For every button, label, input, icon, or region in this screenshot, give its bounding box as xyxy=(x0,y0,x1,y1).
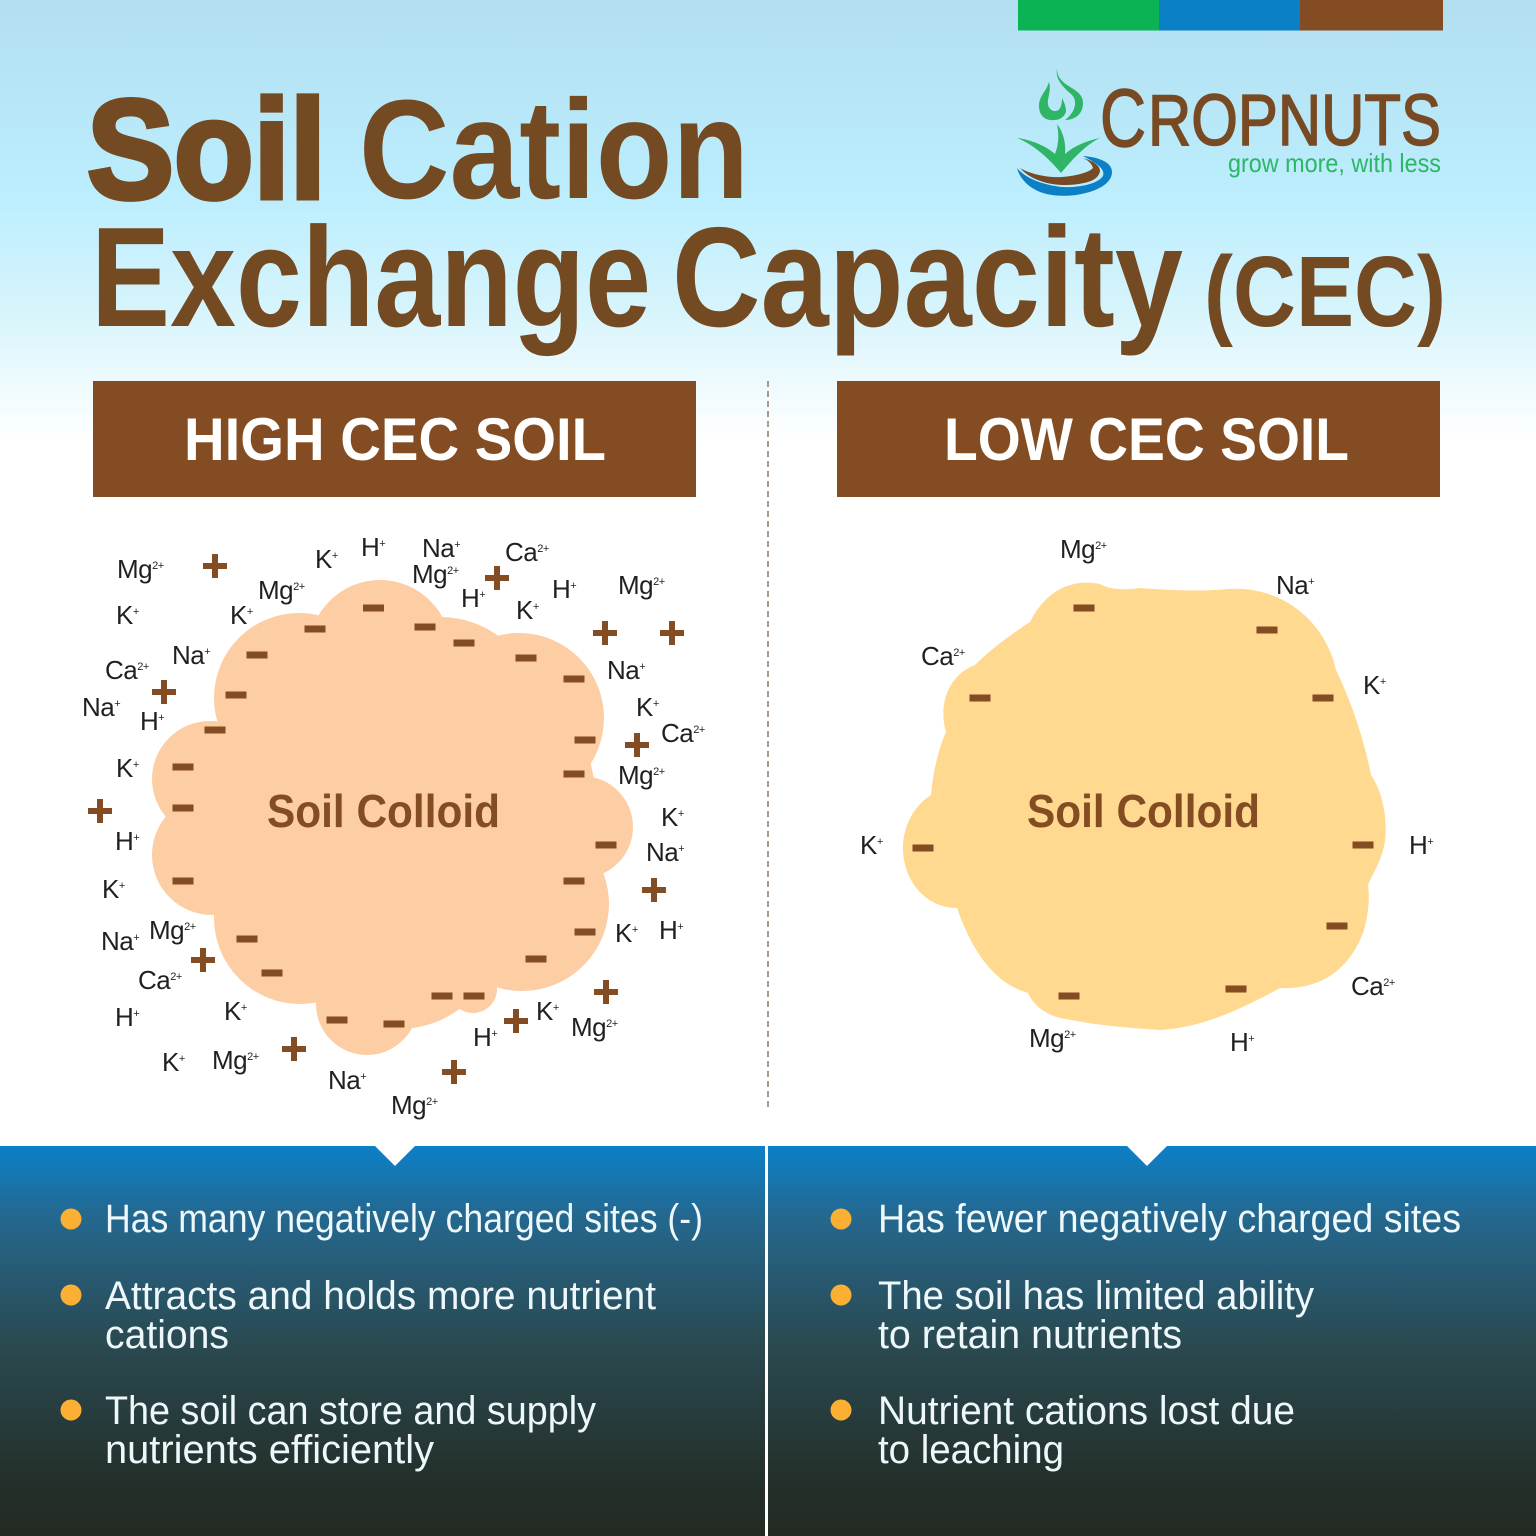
nutrient ions: high: K xyxy=(224,996,241,1026)
nutrient ions: high: + xyxy=(677,921,683,933)
heading banner: high CEC xyxy=(93,381,696,497)
nutrient ions: high: K xyxy=(116,753,133,783)
heading banner: low CEC xyxy=(837,381,1440,497)
nutrient ions: high: H xyxy=(659,915,677,945)
nutrient ions: low xyxy=(860,534,1433,1057)
nutrient ions: low: 2+ xyxy=(1095,540,1107,552)
nutrient ions: high: Mg xyxy=(391,1090,426,1120)
nutrient ions: high: + xyxy=(114,698,120,710)
nutrient ions: high: H xyxy=(115,826,133,856)
label: soil colloid: Soil Colloid xyxy=(267,785,500,837)
bullet text: to retain nutrients xyxy=(878,1313,1182,1357)
nutrient ions: high: Ca xyxy=(105,655,137,685)
nutrient ions: high: Mg xyxy=(212,1045,247,1075)
nutrient ions: low: 2+ xyxy=(1064,1029,1076,1041)
nutrient ions: low: Mg xyxy=(1029,1023,1064,1053)
brand name: C xyxy=(1100,73,1146,164)
nutrient ions: low: 2+ xyxy=(1383,977,1395,989)
nutrient ions: high: Mg xyxy=(149,915,184,945)
nutrient ions: low: H xyxy=(1230,1027,1248,1057)
bullet text: Has many negatively charged sites (-) xyxy=(105,1197,703,1241)
bullet points xyxy=(60,1208,82,1420)
nutrient ions: high: K xyxy=(636,692,653,722)
bullet points xyxy=(830,1208,852,1420)
nutrient ions: low: K xyxy=(1363,670,1380,700)
nutrient ions: high: + xyxy=(332,550,338,562)
positive charges xyxy=(88,554,684,1084)
nutrient ions: high: K xyxy=(661,802,678,832)
nutrient ions: high: Mg xyxy=(618,760,653,790)
nutrient ions: high: K xyxy=(102,874,119,904)
nutrient ions: high: + xyxy=(133,606,139,618)
nutrient ions: high: 2+ xyxy=(247,1051,259,1063)
nutrient ions: high: Ca xyxy=(138,965,170,995)
title: Soil xyxy=(87,70,326,228)
tagline: grow more, with less xyxy=(1228,148,1441,178)
nutrient ions: high: H xyxy=(140,706,158,736)
nutrient ions: high: Na xyxy=(101,926,133,956)
nutrient ions: high: Na xyxy=(82,692,114,722)
heading banner: low CEC: LOW CEC SOIL xyxy=(944,406,1349,473)
nutrient ions: high: 2+ xyxy=(293,581,305,593)
diagram: low CEC colloid xyxy=(860,534,1433,1057)
nutrient ions: high: K xyxy=(116,600,133,630)
nutrient ions: high: + xyxy=(158,712,164,724)
nutrient ions: high: + xyxy=(360,1071,366,1083)
nutrient ions: high: 2+ xyxy=(537,543,549,555)
nutrient ions: high: + xyxy=(247,606,253,618)
bullet text xyxy=(878,1197,1461,1472)
nutrient ions: high: Mg xyxy=(571,1012,606,1042)
nutrient ions: high: 2+ xyxy=(653,766,665,778)
nutrient ions: low: Na xyxy=(1276,570,1308,600)
bullet text: cations xyxy=(105,1313,229,1357)
diagram: high CEC colloid xyxy=(82,532,705,1120)
nutrient ions: high: Mg xyxy=(117,554,152,584)
nutrient ions: high: 2+ xyxy=(170,971,182,983)
bullet text: Has fewer negatively charged sites xyxy=(878,1197,1461,1241)
colour bars xyxy=(1018,0,1443,30)
nutrient ions: high: + xyxy=(133,759,139,771)
nutrient ions: low: Ca xyxy=(1351,971,1383,1001)
bullet text: nutrients efficiently xyxy=(105,1428,434,1472)
nutrient ions: high: K xyxy=(516,595,533,625)
nutrient ions: high: + xyxy=(241,1002,247,1014)
title: Capacity xyxy=(672,198,1183,357)
nutrient ions: high: Na xyxy=(607,655,639,685)
nutrient ions: high: Na xyxy=(328,1065,360,1095)
nutrient ions: low: + xyxy=(1427,836,1433,848)
nutrient ions: high: Na xyxy=(422,533,454,563)
nutrient ions: high: + xyxy=(479,589,485,601)
logo: Cropnuts xyxy=(1017,69,1441,196)
nutrient ions: high: 2+ xyxy=(447,565,459,577)
nutrient ions: high: + xyxy=(632,924,638,936)
negative charges xyxy=(912,604,1374,1000)
bullet text: to leaching xyxy=(878,1428,1064,1472)
nutrient ions: high: + xyxy=(119,880,125,892)
label: soil colloid: Soil Colloid xyxy=(1027,785,1260,837)
nutrient ions: high: 2+ xyxy=(137,661,149,673)
nutrient ions: high: K xyxy=(615,918,632,948)
nutrient ions: high: + xyxy=(133,1008,139,1020)
nutrient ions: high: + xyxy=(639,661,645,673)
nutrient ions: high: K xyxy=(315,544,332,574)
nutrient ions: high: Mg xyxy=(258,575,293,605)
nutrient ions: low: + xyxy=(877,836,883,848)
pointer notch xyxy=(1127,1146,1167,1166)
nutrient ions: high: Na xyxy=(172,640,204,670)
nutrient ions: high: + xyxy=(133,932,139,944)
panel: low CEC properties xyxy=(768,1146,1536,1536)
nutrient ions: low: K xyxy=(860,830,877,860)
bullet text xyxy=(105,1197,703,1472)
nutrient ions: high: + xyxy=(653,698,659,710)
nutrient ions: high: H xyxy=(473,1022,491,1052)
nutrient ions: high: 2+ xyxy=(693,724,705,736)
nutrient ions: high: H xyxy=(115,1002,133,1032)
nutrient ions: high: Mg xyxy=(412,559,447,589)
nutrient ions: high: + xyxy=(204,646,210,658)
nutrient ions: high: H xyxy=(461,583,479,613)
nutrient ions: high: 2+ xyxy=(426,1096,438,1108)
bullet text: Attracts and holds more nutrient xyxy=(105,1274,656,1318)
heading banner: high CEC: HIGH CEC SOIL xyxy=(184,406,606,473)
nutrient ions: high: Ca xyxy=(661,718,693,748)
nutrient ions: high: + xyxy=(179,1053,185,1065)
nutrient ions: high: K xyxy=(536,996,553,1026)
nutrient ions: high: H xyxy=(361,532,379,562)
pointer notch xyxy=(375,1146,415,1166)
title: (CEC) xyxy=(1204,236,1446,348)
panel: high CEC properties xyxy=(0,1146,765,1536)
bullet text: The soil can store and supply xyxy=(105,1389,596,1433)
nutrient ions: high: 2+ xyxy=(184,921,196,933)
nutrient ions: high: 2+ xyxy=(606,1018,618,1030)
nutrient ions: low: + xyxy=(1248,1033,1254,1045)
nutrient ions: low: Mg xyxy=(1060,534,1095,564)
negative charges xyxy=(172,604,616,1028)
nutrient ions: high: + xyxy=(570,580,576,592)
nutrient ions: low: 2+ xyxy=(953,647,965,659)
nutrient ions: low: + xyxy=(1380,676,1386,688)
brand name: ROPNUTS xyxy=(1148,81,1441,161)
nutrient ions: high: + xyxy=(553,1002,559,1014)
nutrient ions: high: + xyxy=(133,832,139,844)
icon: sprout and water xyxy=(1017,69,1112,196)
nutrient ions: low: H xyxy=(1409,830,1427,860)
nutrient ions: low: Ca xyxy=(921,641,953,671)
colloid blob: low xyxy=(903,583,1386,1030)
nutrient ions: high: K xyxy=(162,1047,179,1077)
nutrient ions: high: + xyxy=(454,539,460,551)
title xyxy=(87,70,1446,357)
nutrient ions: high: + xyxy=(678,843,684,855)
nutrient ions: high: Ca xyxy=(505,537,537,567)
nutrient ions: high: + xyxy=(491,1028,497,1040)
nutrient ions: high: + xyxy=(533,601,539,613)
nutrient ions: high: 2+ xyxy=(152,560,164,572)
title: Exchange xyxy=(91,198,651,357)
nutrient ions: high: Mg xyxy=(618,570,653,600)
title: Cation xyxy=(359,70,749,228)
sky background xyxy=(0,0,1536,440)
nutrient ions: high: K xyxy=(230,600,247,630)
nutrient ions: high: Na xyxy=(646,837,678,867)
nutrient ions: high: H xyxy=(552,574,570,604)
nutrient ions: high: + xyxy=(678,808,684,820)
nutrient ions: low: + xyxy=(1308,576,1314,588)
colloid blob: high xyxy=(152,580,633,1055)
bullet text: The soil has limited ability xyxy=(878,1274,1314,1318)
nutrient ions: high xyxy=(82,532,705,1120)
bullet text: Nutrient cations lost due xyxy=(878,1389,1295,1433)
nutrient ions: high: + xyxy=(379,538,385,550)
brand name xyxy=(1100,73,1441,164)
nutrient ions: high: 2+ xyxy=(653,576,665,588)
